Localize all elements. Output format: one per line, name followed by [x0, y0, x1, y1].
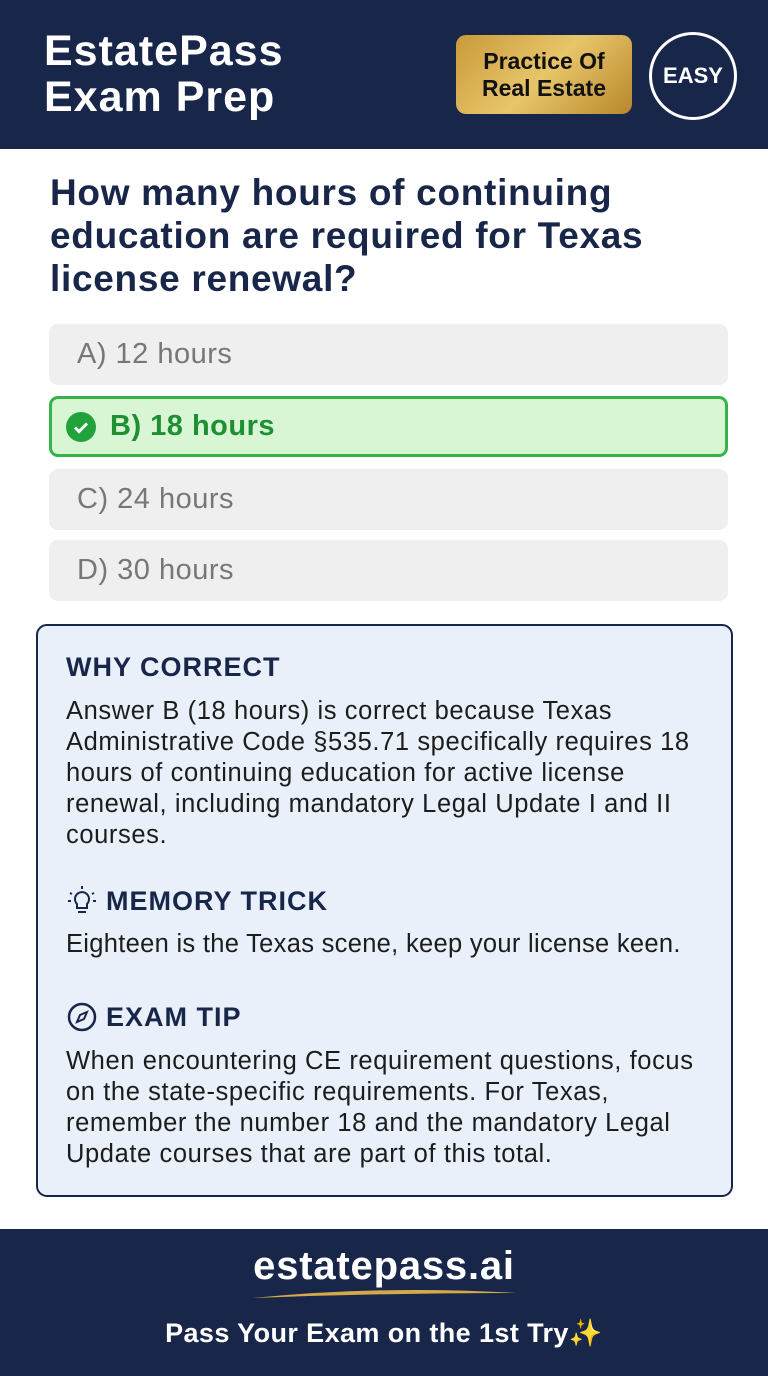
why correct text: Answer B (18 hours) is correct because Texas Administrative Code §535.71 specifically requires 18 hours of continuing education for active license renewal, including mandatory Legal Update I and II courses. — [66, 697, 690, 849]
option A — [49, 324, 728, 385]
option C — [49, 469, 728, 530]
option D — [49, 540, 728, 601]
header — [0, 0, 768, 149]
difficulty badge: EASY — [663, 63, 723, 88]
category badge: Real Estate — [482, 74, 606, 100]
category badge: Practice Of — [483, 48, 605, 74]
explanation panel — [36, 624, 733, 1197]
tagline: Pass Your Exam on the 1st Try✨ — [165, 1318, 603, 1348]
brand title — [44, 27, 284, 121]
footer site name: estatepass.ai — [253, 1244, 515, 1288]
exam tip text: When encountering CE requirement questions, focus on the state-specific requirements. For Texas, remember the number 18 and the mandatory Legal Update courses that are part of this total. — [66, 1047, 694, 1168]
gold underline — [254, 1290, 516, 1298]
option D: D) 30 hours — [77, 554, 234, 586]
difficulty badge — [649, 32, 737, 120]
option C: C) 24 hours — [77, 483, 234, 515]
category badge — [456, 35, 632, 114]
option A: A) 12 hours — [77, 338, 232, 370]
option B correct — [49, 396, 728, 457]
question: How many hours of continuing education are required for Texas license renewal? — [50, 172, 643, 299]
why correct heading: WHY CORRECT — [66, 652, 281, 682]
brand title: Exam Prep — [44, 73, 275, 121]
option B correct: B) 18 hours — [110, 410, 275, 442]
memory trick heading: MEMORY TRICK — [106, 886, 328, 916]
memory trick text: Eighteen is the Texas scene, keep your license keen. — [66, 930, 681, 958]
exam tip heading: EXAM TIP — [106, 1002, 242, 1032]
brand title: EstatePass — [44, 27, 284, 75]
footer — [0, 1229, 768, 1376]
